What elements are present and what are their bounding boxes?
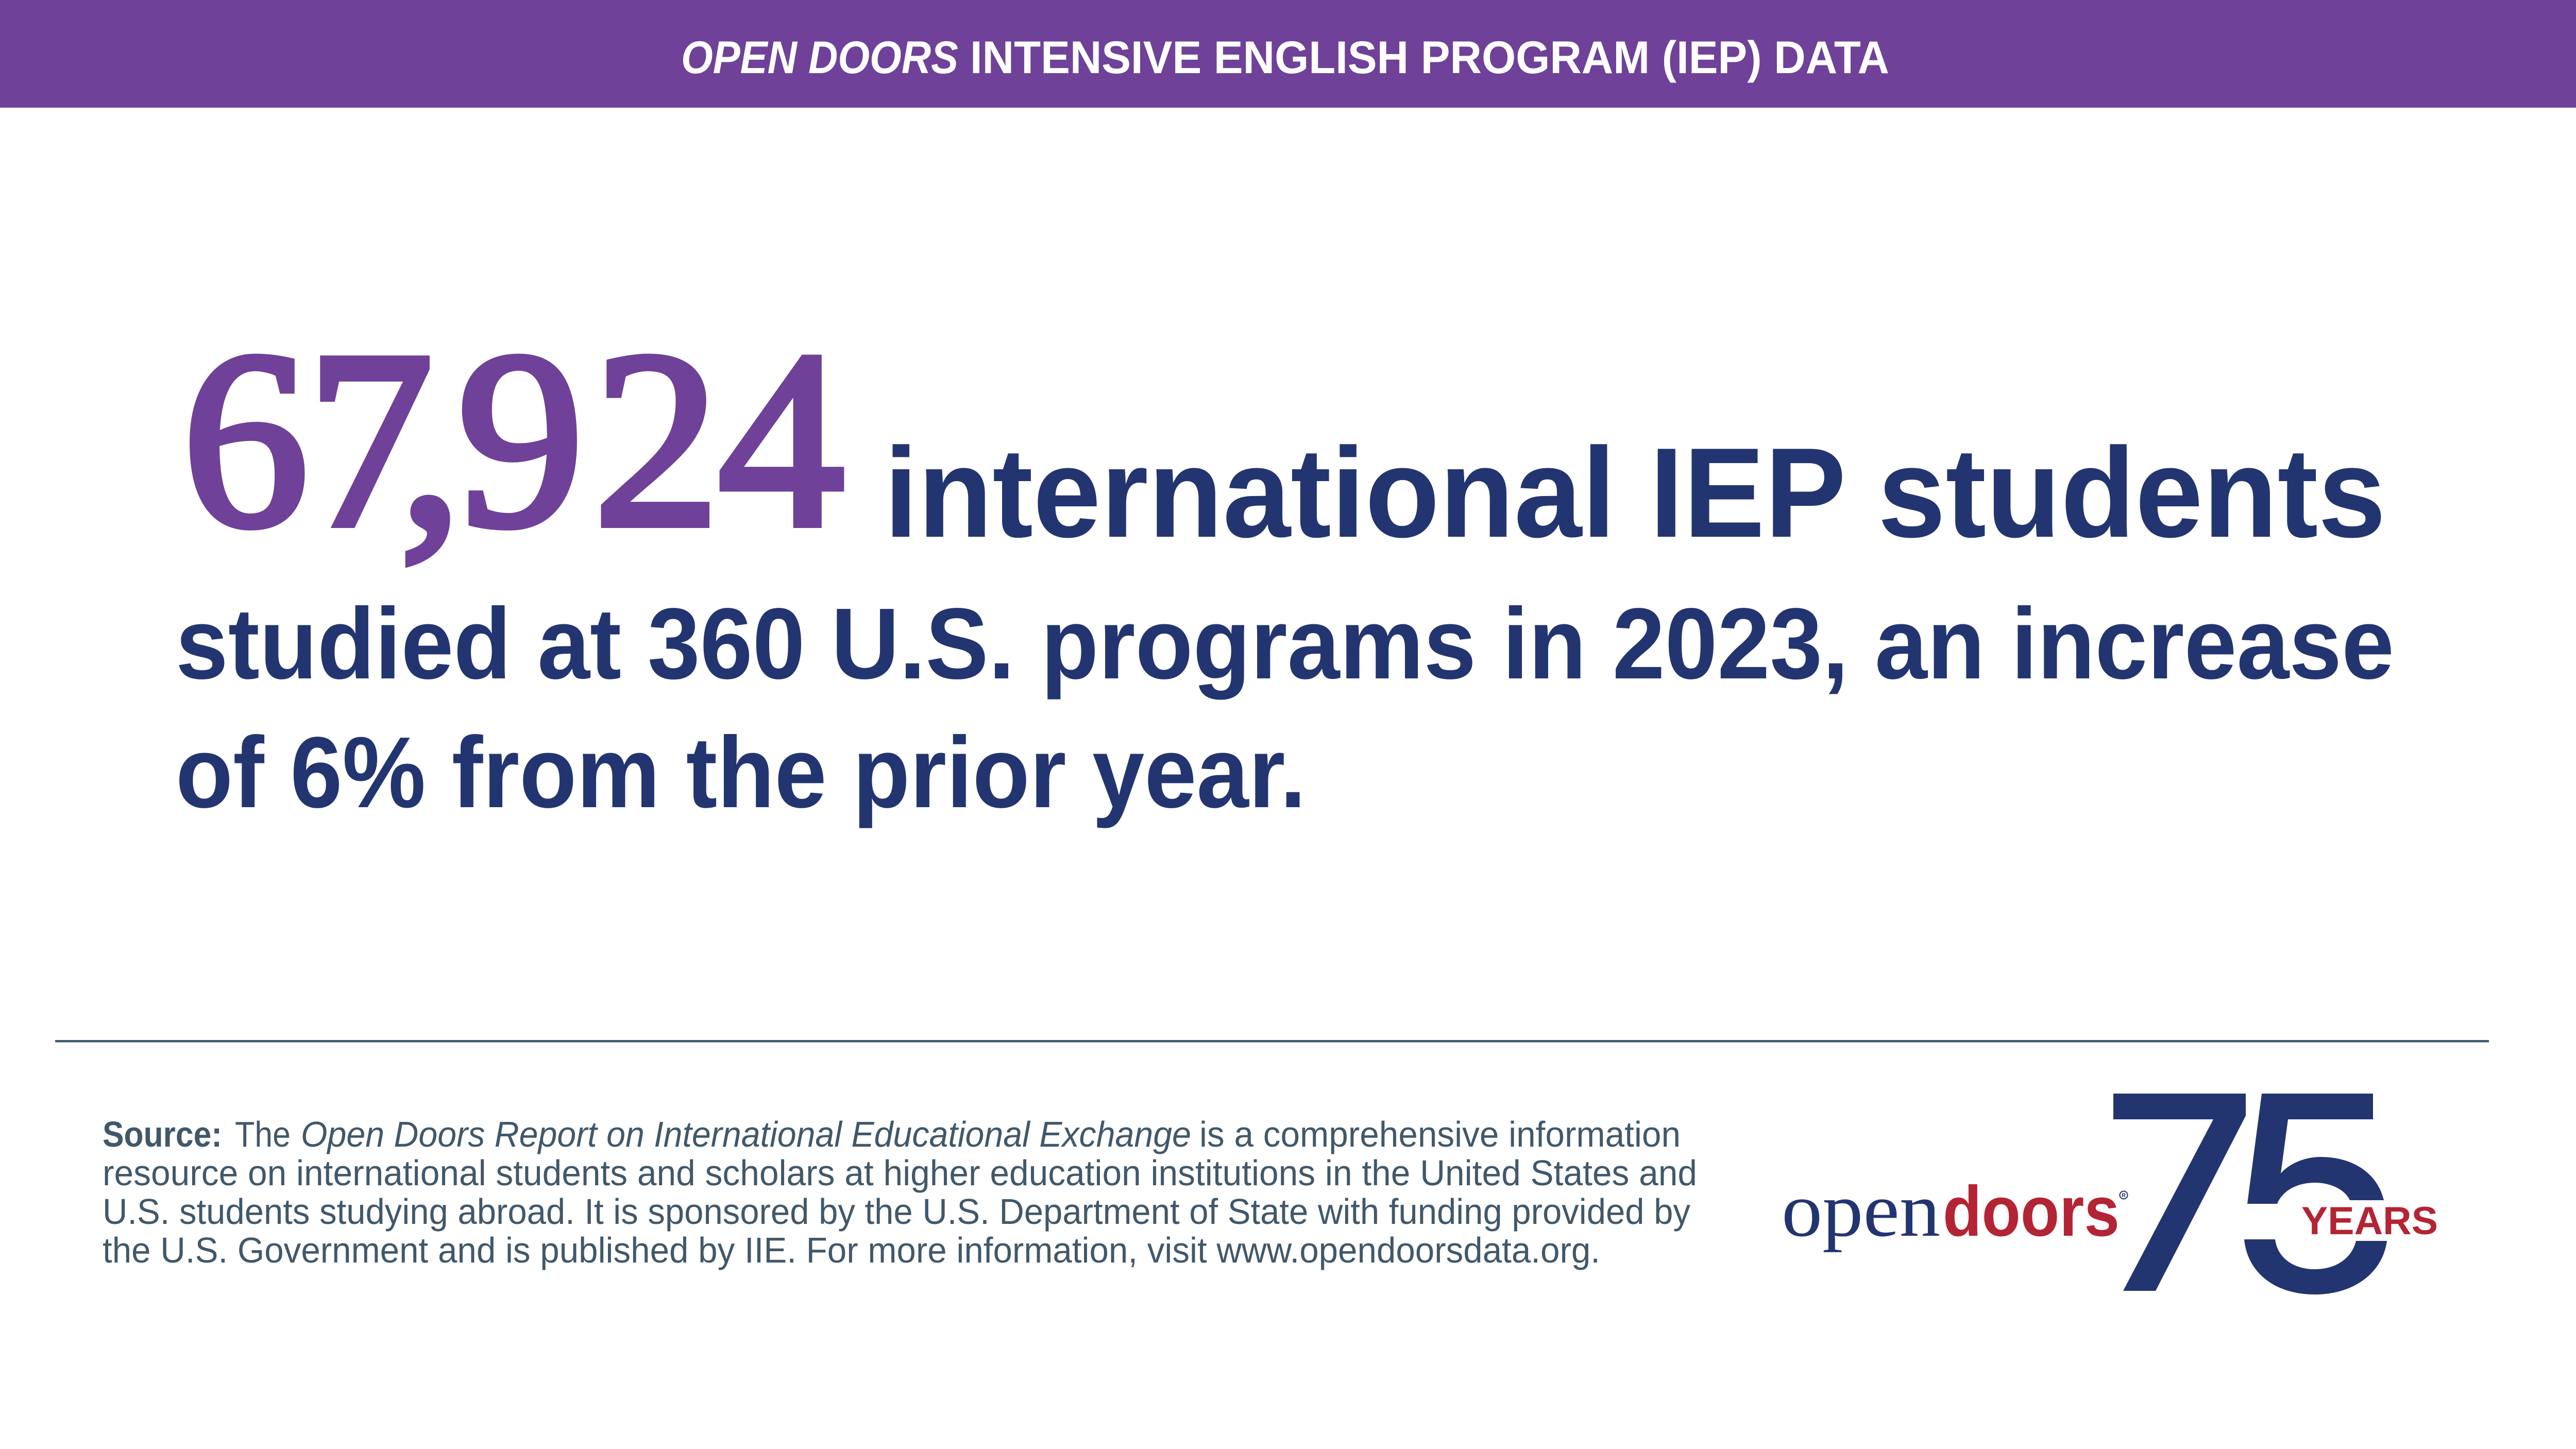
logo label: years: YEARS <box>2301 1199 2438 1243</box>
source note: U.S. students studying abroad. It is sponsored by the U.S. Department of State with funding provided by <box>103 1191 1690 1232</box>
source note: the U.S. Government and is published by IIE. For more information, visit www.opendoorsdata.org. <box>103 1230 1600 1270</box>
source note <box>103 1114 1697 1270</box>
headline text line 2: studied at 360 U.S. programs in 2023, an increase <box>176 587 2394 700</box>
source note: Open Doors Report on International Educational Exchange <box>301 1114 1191 1154</box>
header title: OPEN DOORS <box>681 31 958 83</box>
source note: Source: <box>103 1114 222 1154</box>
registered mark: R <box>2122 1192 2126 1199</box>
logo wordmark: open: open <box>1782 1167 1940 1253</box>
registered mark <box>2120 1191 2128 1199</box>
source note: The <box>235 1114 291 1154</box>
headline text line 3: of 6% from the prior year. <box>176 716 1306 829</box>
numeral 5 <box>2244 1094 2387 1294</box>
header banner <box>0 0 2576 108</box>
logo wordmark: doors: doors <box>1943 1172 2120 1251</box>
source note: is a comprehensive information <box>1199 1114 1681 1154</box>
headline text line 1: international IEP students <box>884 421 2386 564</box>
source note: resource on international students and scholars at higher education institutions in the United States and <box>103 1153 1697 1193</box>
logo: Open Doors 75 years <box>1782 1094 2438 1294</box>
numeral 7 <box>2113 1094 2246 1291</box>
headline statistic: 67,924: 67,924 <box>182 299 844 579</box>
header title: INTENSIVE ENGLISH PROGRAM (IEP) DATA <box>970 31 1889 83</box>
